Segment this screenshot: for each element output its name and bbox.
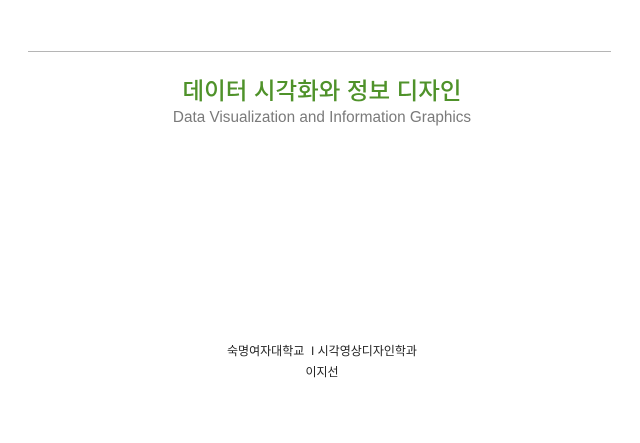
affiliation: 숙명여자대학교 I 시각영상디자인학과 [227, 344, 417, 358]
author: 이지선 [305, 365, 339, 379]
title: 데이터 시각화와 정보 디자인 [182, 78, 462, 104]
subtitle: Data Visualization and Information Graphics [173, 109, 471, 126]
